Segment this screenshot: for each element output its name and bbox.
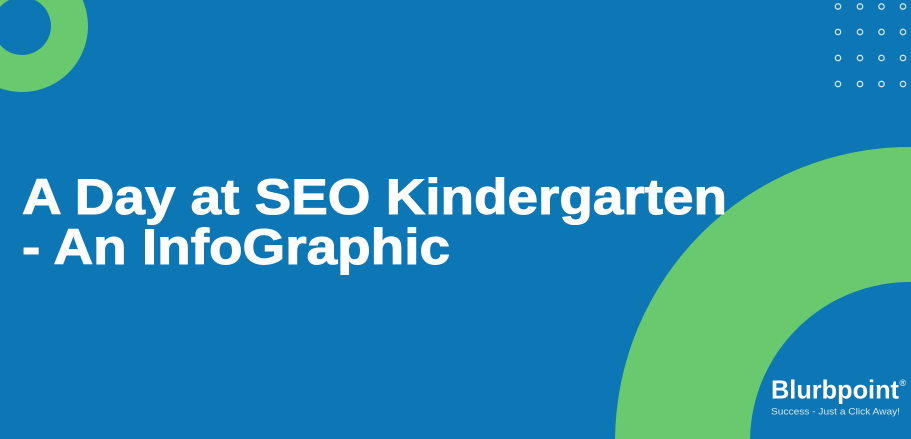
title	[22, 169, 727, 275]
decorative ring: bottom right	[615, 147, 911, 439]
logo: Blurbpoint: ®	[900, 378, 906, 388]
decorative ring: top left	[0, 0, 88, 92]
logo: Blurbpoint: Success - Just a Click Away!	[771, 406, 900, 418]
title: - An InfoGraphic	[22, 219, 450, 275]
logo: Blurbpoint	[771, 374, 906, 418]
logo: Blurbpoint: Blurbpoint	[771, 374, 899, 404]
title: A Day at SEO Kindergarten	[22, 169, 727, 225]
dot grid	[835, 4, 906, 87]
